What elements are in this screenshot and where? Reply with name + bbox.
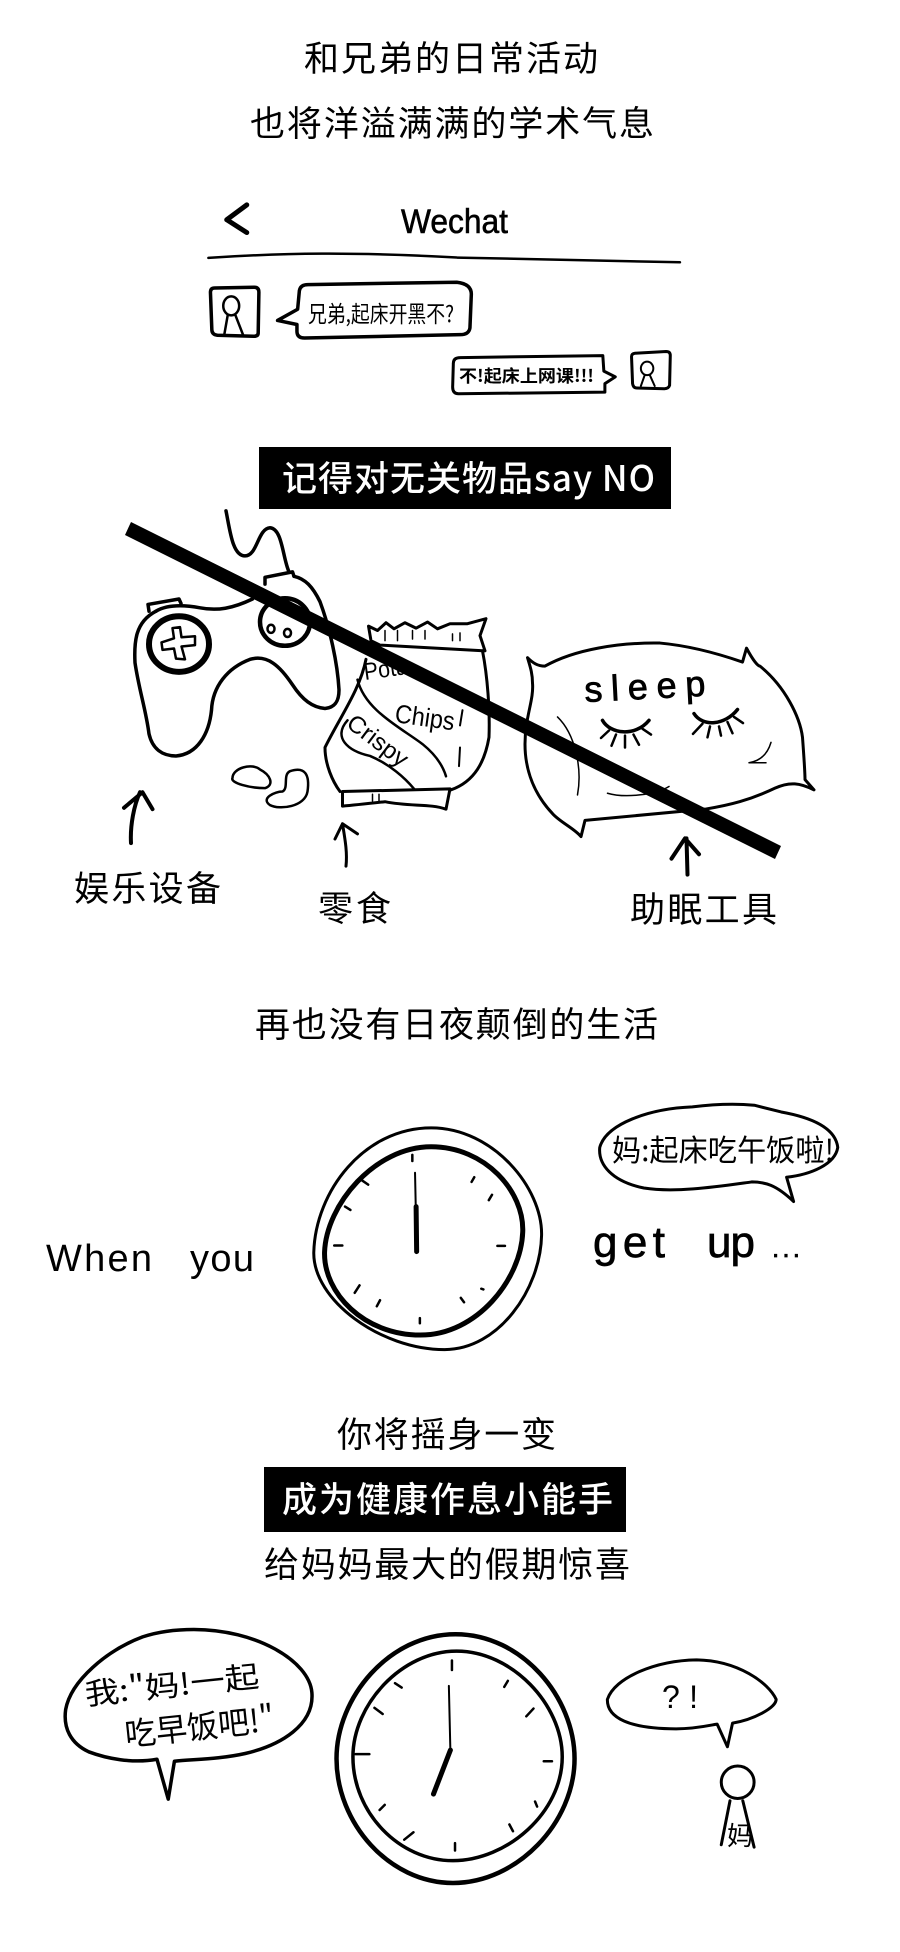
icon: potato chips bag: Crispy — [341, 709, 414, 773]
speech bubble: mom surprised: ?! — [662, 1679, 698, 1715]
handwritten: when you — [46, 1238, 254, 1280]
speech bubble: reply message — [453, 356, 615, 394]
panel: morning clock sketch — [65, 1629, 776, 1883]
icon: game controller — [135, 511, 339, 756]
icon: potato chips bag: Chips — [393, 698, 457, 736]
icon: clock at seven — [337, 1634, 575, 1883]
speech bubble: friend message: 兄弟,起床开黑不? — [308, 295, 454, 329]
wechat header text: Wechat — [401, 203, 509, 241]
icon: potato chips bag: Pota — [362, 653, 410, 686]
speech bubble: mom surprised — [607, 1660, 776, 1747]
speech bubble: breakfast invite: 吃早饭吧!" — [122, 1695, 276, 1756]
label: snacks: 零食 — [318, 881, 391, 932]
handwritten: get up: ... — [772, 1233, 800, 1263]
icon: my avatar — [632, 352, 670, 389]
handwritten: get up: get — [593, 1218, 665, 1267]
arrow: to chips — [335, 824, 358, 866]
icon: clock at noon — [314, 1128, 542, 1350]
speech bubble: mom calls for lunch — [600, 1104, 838, 1202]
title: 和兄弟的日常活动 — [304, 31, 598, 82]
header divider — [208, 254, 680, 262]
icon: friend avatar — [210, 287, 259, 336]
icon: potato chips bag — [325, 619, 489, 809]
heading bar: say no: 记得对无关物品say NO — [282, 451, 655, 502]
icon: sleeping pillow — [525, 643, 814, 837]
panel: wechat chat sketch — [208, 203, 680, 394]
arrow: to pillow — [672, 838, 699, 875]
text: you will transform: 你将摇身一变 — [337, 1407, 556, 1458]
handwritten: when you: When — [46, 1238, 152, 1280]
label: sleep aids: 助眠工具 — [630, 882, 777, 933]
title: 也将洋溢满满的学术气息 — [250, 96, 654, 147]
handwritten: get up — [593, 1218, 800, 1267]
speech bubble: breakfast invite — [65, 1629, 312, 1799]
panel: noon clock sketch — [46, 1104, 838, 1350]
icon: back arrow — [227, 205, 247, 233]
strike-through bar — [125, 522, 781, 859]
icon: mom figure — [721, 1766, 754, 1853]
panel: forbidden items — [74, 511, 814, 933]
text: holiday surprise: 给妈妈最大的假期惊喜 — [264, 1537, 630, 1588]
title — [250, 31, 654, 147]
label: entertainment devices: 娱乐设备 — [74, 861, 221, 912]
section heading: no more reversed days: 再也没有日夜颠倒的生活 — [255, 997, 658, 1048]
speech bubble: friend message — [278, 282, 471, 338]
speech bubble: reply message: 不!起床上网课!!! — [459, 362, 594, 387]
heading bar: healthy schedule: 成为健康作息小能手 — [282, 1472, 613, 1523]
speech bubble: breakfast invite: 我:"妈!一起 — [82, 1652, 261, 1714]
arrow: to controller — [124, 792, 152, 843]
speech bubble: mom calls for lunch: 妈:起床吃午饭啦! — [612, 1126, 834, 1170]
icon: sleeping pillow: sleep — [583, 663, 706, 710]
icon: mom figure: 妈 — [727, 1816, 753, 1853]
handwritten: get up: up — [707, 1218, 755, 1267]
icon: loose chips — [232, 766, 308, 807]
handwritten: when you: you — [190, 1238, 254, 1280]
